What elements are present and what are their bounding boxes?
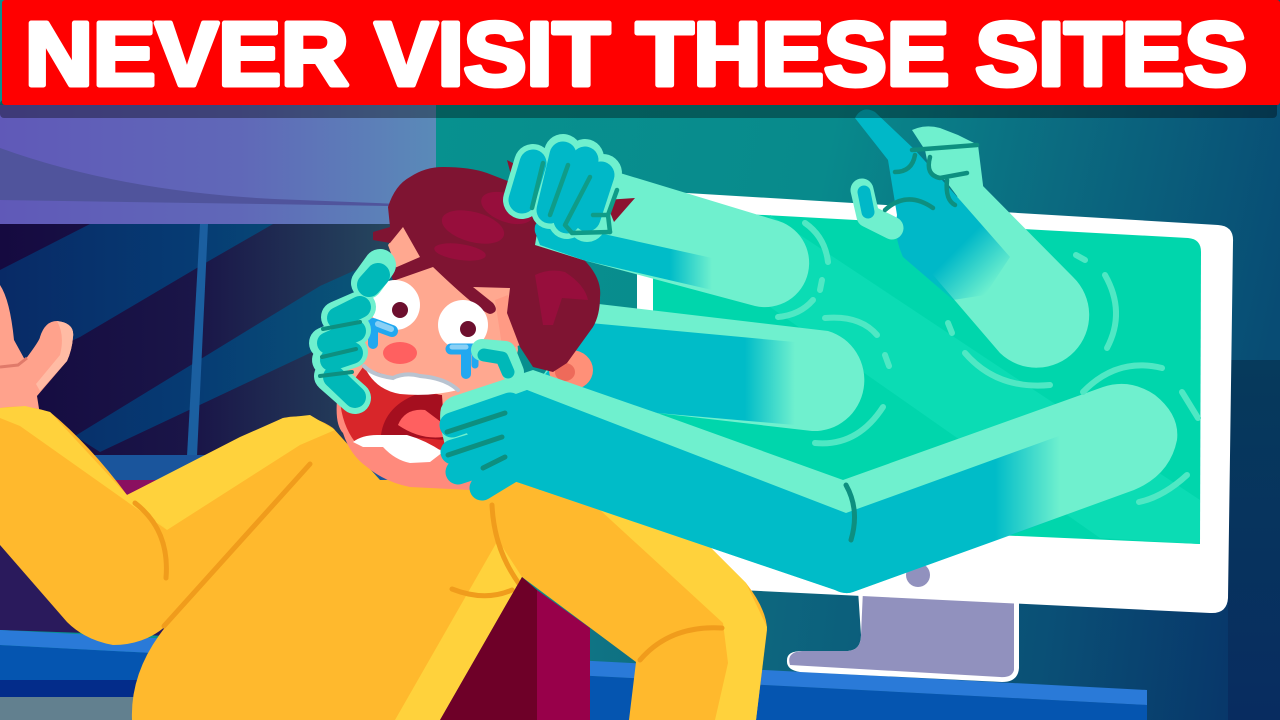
tongue bbox=[398, 410, 445, 438]
forearm glow bbox=[440, 370, 1177, 593]
ghost arm: upper arm at hair bbox=[522, 153, 809, 307]
hair bbox=[373, 167, 600, 372]
title banner bbox=[0, 0, 1280, 118]
right eye bbox=[438, 300, 488, 350]
ghost arm: large front arm bbox=[440, 370, 1177, 593]
ghost arm: middle arm bbox=[540, 303, 864, 431]
monitor screen bbox=[653, 209, 1201, 544]
face bbox=[338, 265, 518, 405]
computer monitor bbox=[637, 190, 1233, 682]
neck and chin bbox=[337, 380, 515, 490]
glow bbox=[325, 265, 380, 398]
screen arc highlights bbox=[778, 223, 1198, 502]
fist fingers glow bbox=[522, 153, 603, 223]
desk bbox=[0, 630, 1147, 720]
ear bbox=[549, 350, 593, 390]
top hand thumb bbox=[862, 190, 892, 228]
sweater fold lines bbox=[135, 464, 722, 660]
monitor power button bbox=[906, 563, 930, 587]
mouth bbox=[340, 367, 445, 450]
upper teeth bbox=[364, 366, 458, 395]
creases bbox=[320, 322, 360, 376]
screen light band bbox=[760, 215, 1200, 544]
arm teal body bbox=[453, 390, 1100, 593]
top hand creases bbox=[885, 145, 977, 210]
thumb bbox=[369, 275, 378, 285]
monitor stand bbox=[787, 590, 1019, 682]
lower teeth bbox=[353, 435, 443, 463]
mouth shadow bbox=[381, 393, 445, 440]
tears bbox=[373, 324, 476, 374]
left eye bbox=[370, 280, 420, 330]
forehead bbox=[388, 225, 425, 270]
ghost hand: front hand on face bbox=[447, 350, 600, 490]
fingers bbox=[452, 405, 515, 488]
hair highlights bbox=[433, 186, 588, 325]
man's raised hand bbox=[0, 285, 73, 415]
ghost arm: top arm from monitor bbox=[855, 110, 1089, 368]
top hand bbox=[855, 110, 1010, 300]
hair tip over arm bbox=[605, 198, 635, 222]
man's sweater body bbox=[0, 406, 767, 720]
fist fingers bbox=[522, 155, 601, 220]
fist creases bbox=[532, 163, 617, 233]
fingers bbox=[328, 307, 360, 397]
elbow crease bbox=[846, 485, 855, 540]
man's head bbox=[337, 160, 600, 490]
ghost hand: left hand on face bbox=[320, 265, 380, 398]
monitor frame bbox=[637, 190, 1233, 613]
title text: NEVER VISIT THESE SITES bbox=[25, 5, 1247, 105]
hair tips bbox=[507, 160, 565, 190]
chair bbox=[440, 577, 590, 720]
nose bbox=[383, 342, 417, 364]
cheek shade bbox=[495, 295, 520, 352]
purple ceiling band bbox=[0, 105, 436, 225]
thumb bbox=[482, 350, 513, 372]
window bbox=[0, 224, 400, 636]
hand creases bbox=[447, 413, 505, 468]
